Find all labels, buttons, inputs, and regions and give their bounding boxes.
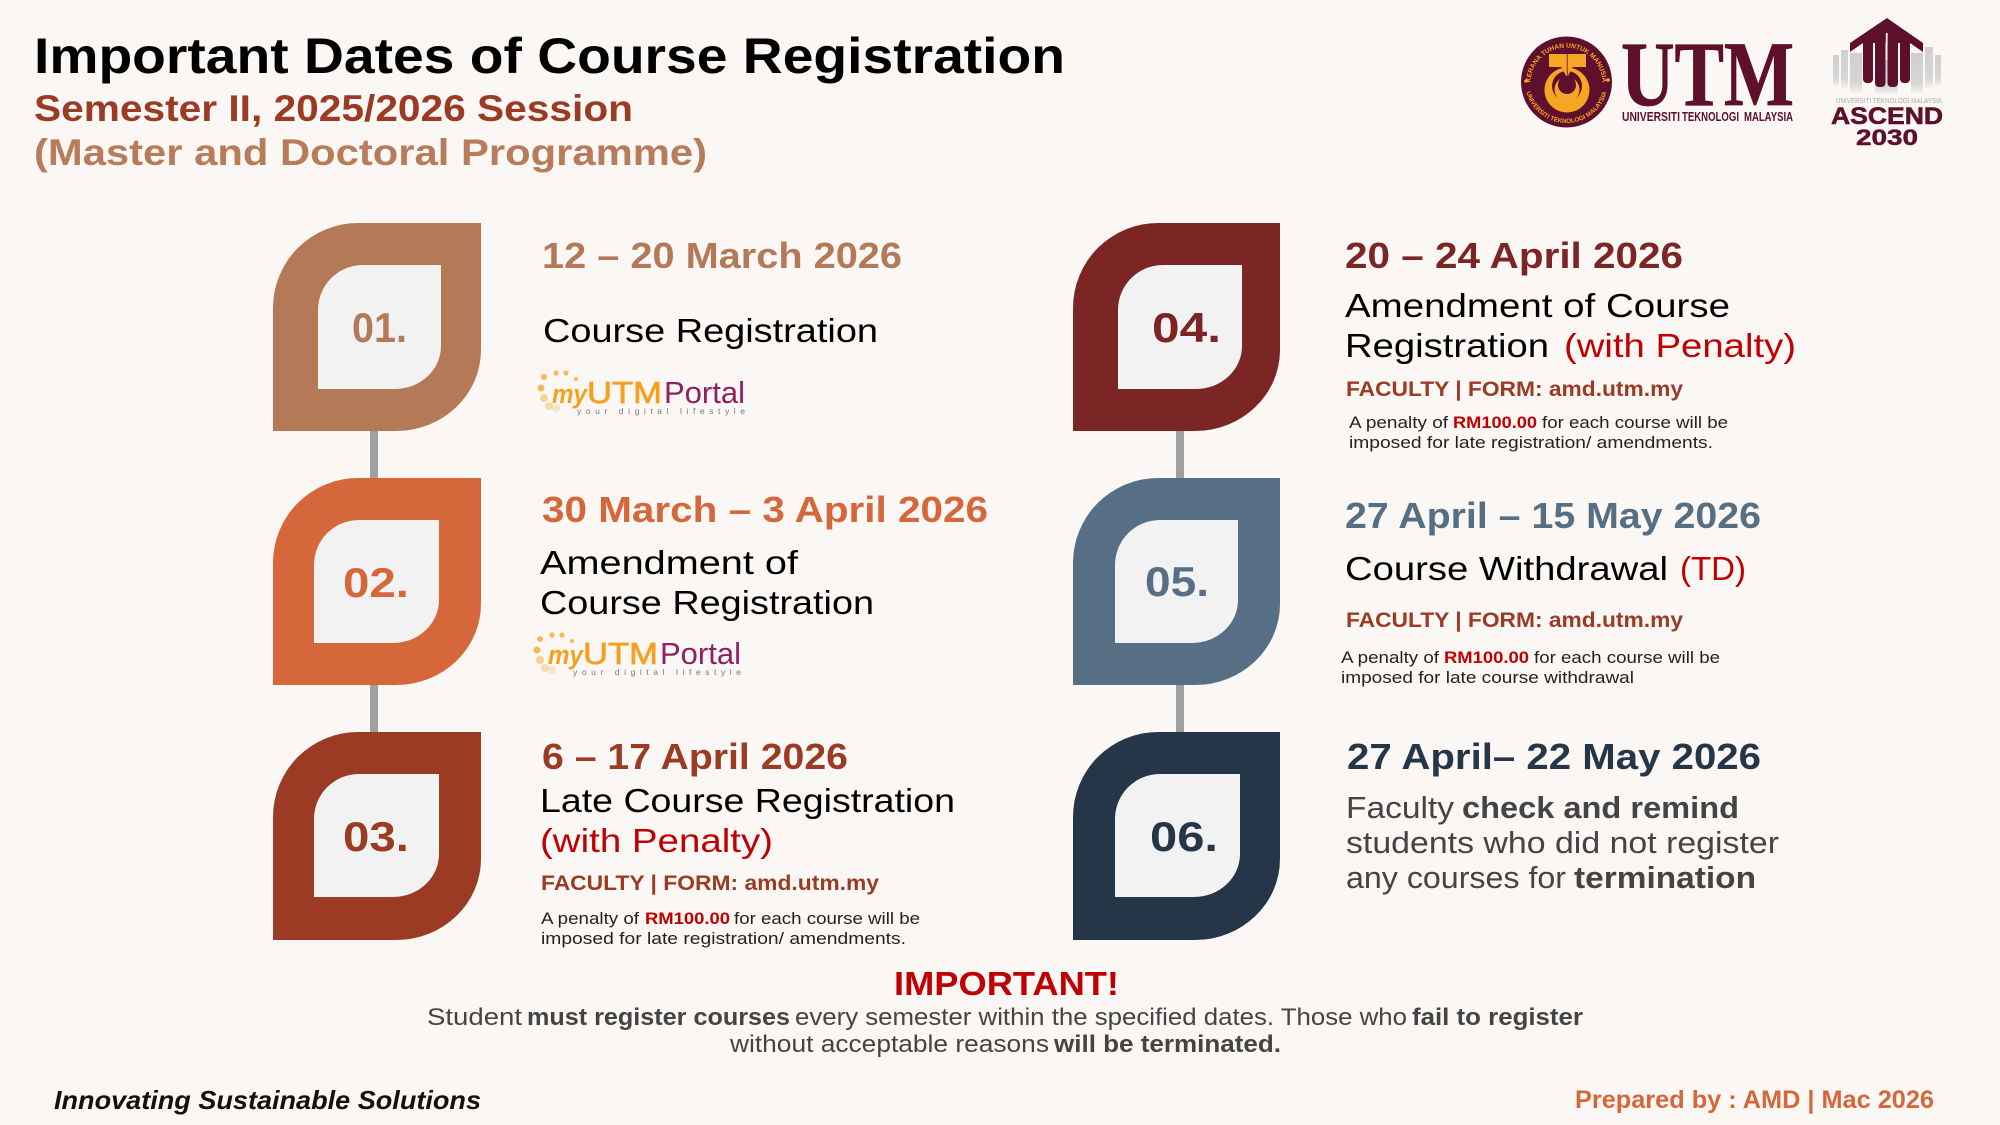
label 02 xyxy=(540,544,874,621)
description 06: check and remind xyxy=(1462,790,1739,825)
UTM tagline xyxy=(1622,110,1793,124)
badge 04 xyxy=(1073,223,1280,431)
UTM logo xyxy=(1521,23,1794,128)
title: Important Dates of Course Registration xyxy=(34,28,1065,84)
date 04: 20 – 24 April 2026 xyxy=(1345,235,1683,276)
icon: grey columns xyxy=(1833,47,1941,94)
label 04: (with Penalty) xyxy=(1564,327,1796,364)
penalty note 04 xyxy=(1349,413,1728,452)
subtitle: semester: Semester II, 2025/2026 Session xyxy=(34,88,633,129)
icon: myUTMPortal logo xyxy=(534,632,741,677)
UTM tagline: MALAYSIA xyxy=(1744,110,1793,124)
badge 01 xyxy=(273,223,481,431)
date 01: 12 – 20 March 2026 xyxy=(542,235,902,276)
icon: myUTMPortal logo: my xyxy=(548,640,585,670)
penalty note 03: for each course will be xyxy=(734,909,920,928)
notice text: every semester within the specified dates. Those who xyxy=(795,1004,1407,1031)
notice text: fail to register xyxy=(1412,1004,1583,1031)
label 02: Amendment of xyxy=(540,544,799,581)
footer credit: Prepared by : AMD | Mac 2026 xyxy=(1575,1086,1934,1114)
penalty note 05: imposed for late course withdrawal xyxy=(1341,668,1634,687)
label 04 xyxy=(1345,287,1796,364)
step 02 xyxy=(273,478,988,685)
badge 06 xyxy=(1073,732,1280,940)
description 06: Faculty xyxy=(1346,790,1455,825)
label 05 xyxy=(1345,550,1746,587)
date 02: 30 March – 3 April 2026 xyxy=(542,489,988,530)
penalty note 05: A penalty of xyxy=(1341,648,1439,667)
badge 04: 04. xyxy=(1152,304,1221,351)
icon: UTM crest: KERANA TUHAN UNTUK MANUSIA xyxy=(1526,43,1606,82)
badge 03: 03. xyxy=(343,813,409,860)
UTM tagline: TEKNOLOGI xyxy=(1682,110,1739,124)
subtitle: programme: (Master and Doctoral Programme) xyxy=(34,132,707,173)
footer tagline: Innovating Sustainable Solutions xyxy=(54,1085,481,1115)
ASCEND word: ASCEND xyxy=(1831,103,1943,130)
icon: myUTMPortal logo: Portal xyxy=(664,375,745,410)
penalty note 03 xyxy=(541,909,920,948)
label 04: Registration xyxy=(1345,327,1549,364)
notice text: must register courses xyxy=(527,1004,790,1031)
badge 02 xyxy=(273,478,481,685)
description 06: students who did not register xyxy=(1346,825,1779,860)
notice text: without acceptable reasons xyxy=(729,1031,1049,1058)
label 01: Course Registration xyxy=(543,312,878,349)
date 06: 27 April– 22 May 2026 xyxy=(1347,736,1761,777)
label 02: Course Registration xyxy=(540,584,874,621)
connector lines xyxy=(370,431,1184,733)
icon: myUTMPortal logo: UTM xyxy=(583,636,658,671)
penalty note 04: RM100.00 xyxy=(1453,413,1537,432)
badge 05 xyxy=(1073,478,1280,685)
description 06 xyxy=(1346,790,1779,895)
step 01 xyxy=(273,223,902,431)
important notice xyxy=(427,965,1583,1058)
icon: myUTMPortal logo: my xyxy=(552,379,589,409)
penalty note 04: for each course will be xyxy=(1542,413,1728,432)
notice text: will be terminated. xyxy=(1053,1031,1281,1058)
UTM wordmark: UTM xyxy=(1621,23,1794,125)
penalty note 03: imposed for late registration/ amendments. xyxy=(541,929,906,948)
icon: myUTMPortal logo: your digital lifestyle xyxy=(577,406,745,416)
label 03 xyxy=(540,782,955,859)
ASCEND 2030 logo xyxy=(1831,18,1943,150)
label 03: Late Course Registration xyxy=(540,782,955,819)
step 05 xyxy=(1073,478,1761,687)
notice text: Student xyxy=(427,1004,522,1031)
penalty note 05: RM100.00 xyxy=(1444,648,1529,667)
form link 04: FACULTY | FORM: amd.utm.my xyxy=(1346,378,1683,401)
date 05: 27 April – 15 May 2026 xyxy=(1345,495,1761,536)
small tagline: UNIVERSITI TEKNOLOGI MALAYSIA xyxy=(1836,98,1942,105)
form link 05: FACULTY | FORM: amd.utm.my xyxy=(1346,609,1683,632)
badge 02: 02. xyxy=(343,559,409,606)
icon: myUTMPortal logo xyxy=(538,370,745,416)
icon: myUTMPortal logo: your digital lifestyle xyxy=(573,667,741,677)
badge 01: 01. xyxy=(352,304,407,351)
notice text xyxy=(427,1004,1583,1058)
penalty note 03: A penalty of xyxy=(541,909,639,928)
badge 03 xyxy=(273,732,481,940)
icon: maroon roof xyxy=(1850,18,1923,87)
form link 03: FACULTY | FORM: amd.utm.my xyxy=(541,872,879,895)
UTM tagline: UNIVERSITI xyxy=(1622,110,1680,124)
label 04: Amendment of Course xyxy=(1345,287,1730,324)
penalty note 05: for each course will be xyxy=(1534,648,1720,667)
penalty note 04: imposed for late registration/ amendments. xyxy=(1349,433,1713,452)
penalty note 03: RM100.00 xyxy=(645,909,730,928)
description 06: termination xyxy=(1574,860,1756,895)
icon: UTM crest xyxy=(1521,36,1612,128)
label 05: (TD) xyxy=(1680,550,1746,587)
badge 05: 05. xyxy=(1145,558,1209,605)
icon: myUTMPortal logo: Portal xyxy=(660,636,741,671)
badge 06: 06. xyxy=(1150,813,1218,860)
label 03: (with Penalty) xyxy=(540,822,773,859)
step 04 xyxy=(1073,223,1796,452)
notice heading: IMPORTANT! xyxy=(894,965,1119,1002)
penalty note 05 xyxy=(1341,648,1720,687)
step 06 xyxy=(1073,732,1779,940)
description 06: any courses for xyxy=(1346,860,1566,895)
2030 word: 2030 xyxy=(1856,125,1918,150)
step 03 xyxy=(273,732,955,948)
label 05: Course Withdrawal xyxy=(1345,550,1668,587)
icon: myUTMPortal logo: UTM xyxy=(587,375,662,410)
icon: UTM crest: UNIVERSITI TEKNOLOGI MALAYSIA xyxy=(1526,91,1606,124)
date 03: 6 – 17 April 2026 xyxy=(542,736,848,777)
penalty note 04: A penalty of xyxy=(1349,413,1448,432)
header titles xyxy=(34,28,1065,173)
